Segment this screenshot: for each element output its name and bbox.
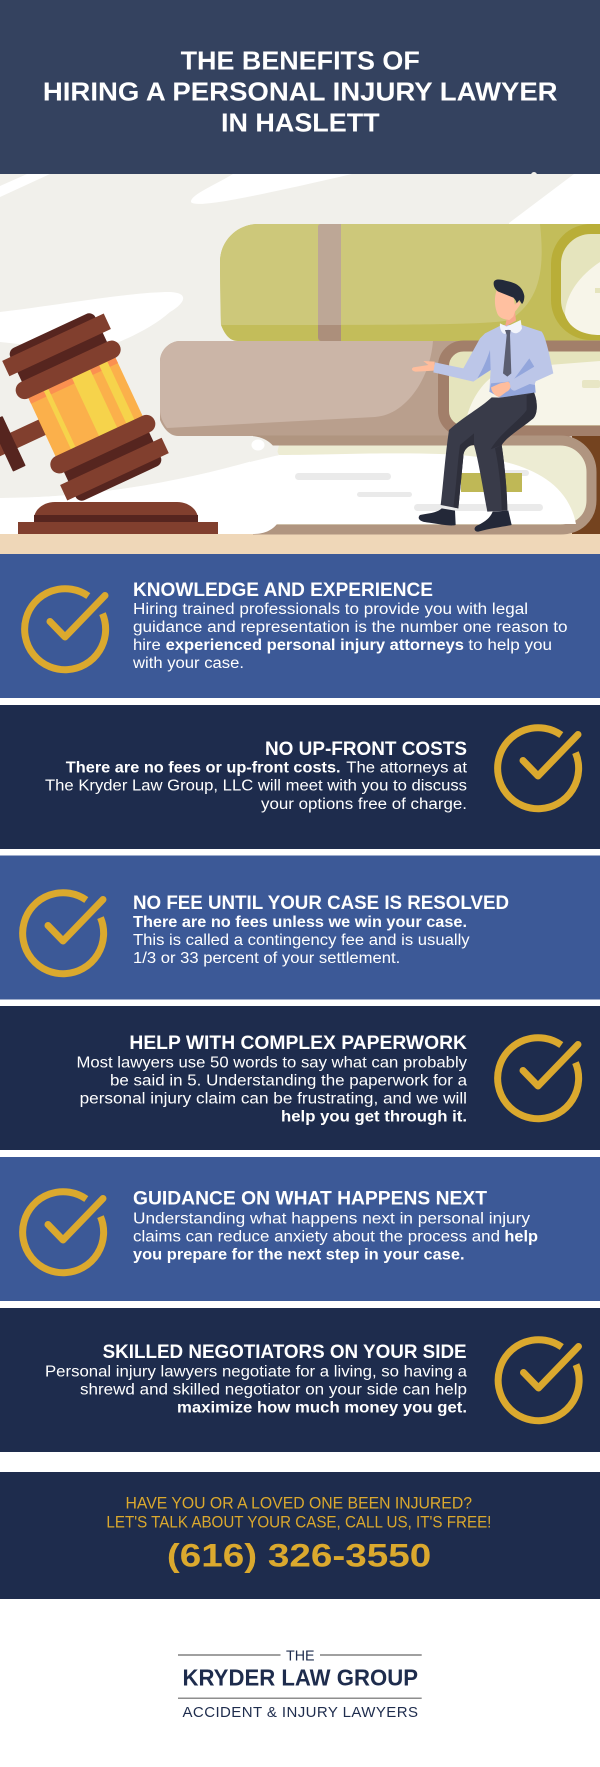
logo: The Kryder Law Group bbox=[178, 1649, 422, 1721]
phone number: (616) 326-3550 bbox=[167, 1538, 431, 1574]
heading: HELP WITH COMPLEX PAPERWORK bbox=[129, 1033, 467, 1054]
title: IN HASLETT bbox=[221, 110, 380, 138]
body text: be said in 5. Understanding the paperwork for a bbox=[110, 1072, 468, 1089]
body text: experienced personal injury attorneys bbox=[166, 637, 464, 654]
title: HIRING A PERSONAL INJURY LAWYER bbox=[43, 79, 558, 107]
body text bbox=[133, 1210, 538, 1263]
panel: no up-front costs bbox=[0, 705, 600, 849]
neck bbox=[505, 312, 516, 327]
call to action text: HAVE YOU OR A LOVED ONE BEEN INJURED? bbox=[126, 1493, 472, 1512]
bottom book bbox=[0, 436, 600, 534]
body text: There are no fees unless we win your case. bbox=[133, 914, 467, 931]
body text bbox=[132, 601, 567, 672]
body text: This is called a contingency fee and is usually bbox=[133, 932, 470, 949]
body text: hire bbox=[133, 637, 161, 654]
body text bbox=[45, 760, 468, 813]
icon: check in circle bbox=[498, 1340, 579, 1421]
icon: check in circle bbox=[498, 728, 579, 809]
logo: The Kryder Law Group: KRYDER LAW GROUP bbox=[182, 1664, 418, 1690]
body text: Understanding what happens next in personal injury bbox=[133, 1210, 530, 1227]
body text: There are no fees or up-front costs. bbox=[66, 760, 341, 777]
logo: The Kryder Law Group: THE bbox=[286, 1649, 315, 1665]
body text: Most lawyers use 50 words to say what can probably bbox=[76, 1054, 467, 1071]
body text: help bbox=[504, 1228, 538, 1245]
panel: help with complex paperwork bbox=[0, 1006, 600, 1150]
body text: maximize how much money you get. bbox=[177, 1400, 467, 1417]
extended hand bbox=[412, 361, 435, 372]
body text bbox=[76, 1054, 468, 1125]
hair bbox=[494, 280, 524, 304]
heading: GUIDANCE ON WHAT HAPPENS NEXT bbox=[133, 1189, 487, 1210]
body text: with your case. bbox=[132, 655, 244, 672]
heading: SKILLED NEGOTIATORS ON YOUR SIDE bbox=[103, 1342, 467, 1363]
body text: The Kryder Law Group, LLC will meet with you to discuss bbox=[45, 778, 467, 795]
shirt bbox=[433, 325, 553, 398]
call to action panel bbox=[0, 1472, 600, 1599]
icon: check in circle bbox=[23, 1192, 104, 1273]
body text: guidance and representation is the number one reason to bbox=[133, 619, 568, 636]
header: title banner bbox=[0, 0, 600, 174]
face bbox=[495, 290, 521, 320]
body text: help you get through it. bbox=[281, 1108, 467, 1125]
hand on belly bbox=[491, 382, 510, 397]
gavel base bbox=[18, 502, 218, 534]
body text: to help you bbox=[468, 637, 552, 654]
panel: guidance on what happens next bbox=[0, 1157, 600, 1301]
panel: no fee until your case is resolved bbox=[0, 856, 600, 1000]
body text bbox=[45, 1364, 468, 1417]
floor bbox=[0, 533, 600, 554]
panel: skilled negotiators on your side bbox=[0, 1308, 600, 1452]
panel: knowledge and experience bbox=[0, 554, 600, 698]
heading: NO UP-FRONT COSTS bbox=[265, 739, 467, 760]
body text bbox=[133, 914, 470, 967]
tie bbox=[503, 330, 511, 377]
illustration: lawyer sitting on law books beside a gavel bbox=[0, 172, 600, 554]
body text: shrewd and skilled negotiator on your side can help bbox=[80, 1382, 467, 1399]
call to action text bbox=[106, 1493, 491, 1531]
collar bbox=[500, 320, 522, 334]
body text: 1/3 or 33 percent of your settlement. bbox=[133, 950, 400, 967]
body text: Personal injury lawyers negotiate for a living, so having a bbox=[45, 1364, 468, 1381]
icon: check in circle bbox=[25, 589, 106, 670]
icon: check in circle bbox=[23, 893, 104, 974]
logo: The Kryder Law Group: ACCIDENT & INJURY LAWYERS bbox=[182, 1704, 418, 1721]
heading: KNOWLEDGE AND EXPERIENCE bbox=[133, 580, 433, 601]
body text: claims can reduce anxiety about the process and bbox=[133, 1228, 500, 1245]
body text: personal injury claim can be frustrating, and we will bbox=[80, 1090, 467, 1107]
pants bbox=[441, 393, 537, 512]
title bbox=[43, 47, 558, 138]
middle tan book bbox=[160, 341, 600, 436]
body text: your options free of charge. bbox=[261, 796, 467, 813]
shoes bbox=[419, 508, 512, 532]
title: THE BENEFITS OF bbox=[181, 47, 420, 75]
icon: check in circle bbox=[498, 1038, 579, 1119]
heading: NO FEE UNTIL YOUR CASE IS RESOLVED bbox=[133, 893, 509, 914]
gavel head bbox=[0, 307, 173, 530]
body text: Hiring trained professionals to provide you with legal bbox=[133, 601, 528, 618]
body text: The attorneys at bbox=[346, 760, 468, 777]
lawyer figure bbox=[412, 280, 553, 532]
call to action text: LET'S TALK ABOUT YOUR CASE, CALL US, IT'S FREE! bbox=[106, 1512, 491, 1531]
top green book bbox=[220, 224, 600, 341]
body text: you prepare for the next step in your case. bbox=[133, 1246, 465, 1263]
